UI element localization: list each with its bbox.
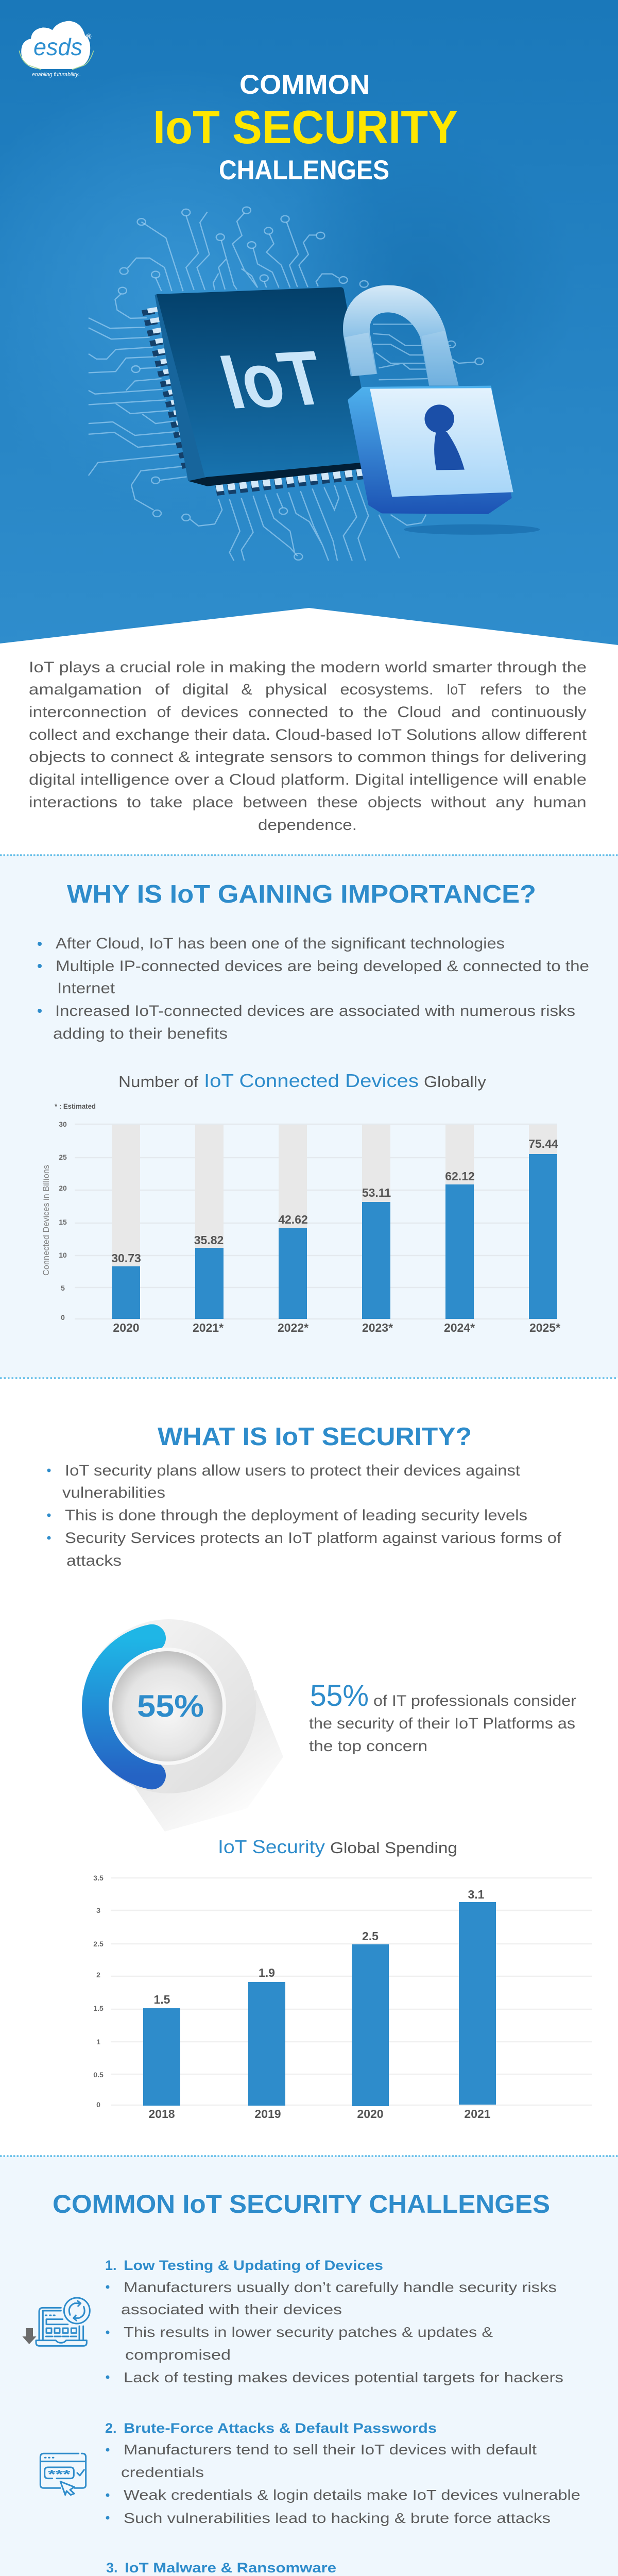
item 1: low testing and updating: associated with their devices	[121, 2301, 342, 2317]
intro paragraph: physical	[265, 681, 327, 698]
item 2: brute-force attacks: Manufacturers tend to sell their IoT devices with default	[124, 2442, 537, 2458]
logo: esds cloud: ®	[85, 32, 92, 41]
bar chart: connected devices globally: 35.82	[194, 1233, 224, 1247]
chip body	[154, 287, 376, 486]
chart title: IoT security spending: IoT Security	[218, 1836, 325, 1857]
intro paragraph: any	[495, 794, 524, 811]
bar chart: IoT security global spending: 3.5	[93, 1874, 104, 1882]
item 1: low testing and updating: Low Testing & Updating of Devices	[124, 2258, 383, 2273]
hero banner	[0, 0, 618, 645]
item 2: brute-force attacks	[105, 2420, 580, 2526]
stat callout: the top concern	[309, 1738, 427, 1755]
stat callout: 55%	[310, 1679, 369, 1713]
bar chart: connected devices globally: 10	[59, 1251, 67, 1259]
item 2: brute-force attacks: credentials	[121, 2464, 204, 2480]
intro paragraph: devices	[181, 704, 238, 721]
bar chart: IoT security global spending: 3.1	[468, 1888, 485, 1901]
item 3: malware and ransomware: IoT Malware & Ransomware	[125, 2560, 336, 2575]
intro paragraph: interactions	[29, 794, 117, 811]
item 2: brute-force attacks: Weak credentials & login details make IoT devices vulnerable	[124, 2487, 580, 2503]
bar chart: IoT security global spending: 0	[96, 2100, 100, 2109]
bar chart: connected devices globally: Connected Devices in Billions	[41, 1165, 51, 1276]
bar chart: connected devices globally: 53.11	[362, 1186, 391, 1199]
bar chart: connected devices globally: * : Estimated	[55, 1102, 96, 1110]
bar chart: connected devices globally: 2025*	[529, 1321, 560, 1334]
chart title: IoT security spending	[218, 1836, 457, 1857]
intro paragraph: the	[364, 704, 387, 721]
chart title: IoT connected devices: Globally	[424, 1073, 487, 1091]
title	[153, 70, 458, 185]
stat callout	[309, 1679, 576, 1755]
intro paragraph: amalgamation	[29, 681, 142, 698]
chip label IoT: IoT	[211, 335, 334, 425]
donut gauge: 55 percent: 55%	[137, 1689, 204, 1723]
bullets: why IoT matters	[38, 935, 589, 1042]
bullets: why IoT matters: After Cloud, IoT has been one of the significant technologies	[56, 935, 505, 952]
bar chart: connected devices globally: 2022*	[278, 1321, 308, 1334]
bar chart: IoT security global spending: 3	[96, 1906, 100, 1914]
item 1: low testing and updating: compromised	[125, 2347, 231, 2363]
intro paragraph: ecosystems.	[340, 681, 434, 698]
item 1: low testing and updating: Lack of testing makes devices potential targets for hackers	[124, 2369, 563, 2385]
intro paragraph: between	[243, 794, 307, 811]
bar chart: connected devices globally: 25	[59, 1153, 67, 1161]
stat callout: the security of their IoT Platforms as	[309, 1715, 575, 1732]
bar chart: connected devices globally: 20	[59, 1184, 67, 1192]
chart title: IoT security spending: Global Spending	[330, 1839, 457, 1857]
intro paragraph: digital intelligence over a Cloud platform. Digital intelligence will enable	[29, 771, 587, 788]
bullets: what is IoT security: IoT security plans allow users to protect their devices against	[65, 1462, 521, 1479]
chip pins	[148, 308, 364, 491]
bar chart: connected devices globally: 42.62	[278, 1213, 308, 1226]
logo: esds cloud: enabling futurability..	[32, 72, 81, 78]
intro paragraph: IoT	[447, 681, 466, 698]
bullets: why IoT matters: adding to their benefits	[53, 1025, 228, 1042]
intro paragraph: place	[193, 794, 233, 811]
bullets: why IoT matters: Multiple IP-connected devices are being developed & connected to the	[56, 958, 589, 975]
bar chart: connected devices globally: 2024*	[444, 1321, 475, 1334]
illustration: IoT chip and open padlock	[89, 207, 540, 561]
intro paragraph: to	[127, 794, 141, 811]
intro paragraph: the	[563, 681, 587, 698]
intro paragraph: and	[451, 704, 481, 721]
bar chart: connected devices globally: 2021*	[193, 1321, 224, 1334]
bullets: what is IoT security: This is done through the deployment of leading security levels	[65, 1507, 527, 1524]
intro paragraph: these	[317, 794, 358, 811]
bar chart: connected devices globally: 30	[59, 1120, 67, 1128]
logo: esds cloud: esds	[33, 33, 82, 60]
bar chart: IoT security global spending: 2021	[464, 2107, 491, 2121]
intro paragraph: objects	[368, 794, 422, 811]
item 1: low testing and updating: 1.	[105, 2258, 117, 2273]
intro paragraph: connected	[248, 704, 329, 721]
bar chart: IoT security global spending: 1.9	[259, 1966, 275, 1979]
item 2: brute-force attacks: Brute-Force Attacks & Default Passwords	[124, 2420, 437, 2436]
intro paragraph: take	[150, 794, 182, 811]
intro paragraph: of	[157, 704, 171, 721]
bar chart: connected devices globally: 75.44	[528, 1137, 558, 1150]
bar chart: connected devices globally: 15	[59, 1218, 67, 1226]
chart title: IoT connected devices	[118, 1070, 487, 1091]
bar chart: connected devices globally: 5	[61, 1284, 65, 1292]
padlock body	[348, 386, 513, 514]
stat callout: of IT professionals consider	[373, 1692, 576, 1709]
intro paragraph: interconnection	[29, 704, 147, 721]
logo: esds cloud	[19, 21, 94, 78]
intro paragraph: continuously	[491, 704, 587, 721]
intro paragraph: human	[533, 794, 587, 811]
bullets: what is IoT security: attacks	[66, 1552, 122, 1569]
intro paragraph: to	[339, 704, 353, 721]
item 2: brute-force attacks: 2.	[105, 2420, 117, 2436]
bullets: why IoT matters: Increased IoT-connected devices are associated with numerous risks	[55, 1003, 575, 1020]
intro paragraph: to	[535, 681, 550, 698]
intro paragraph: objects to connect & integrate sensors to common things for delivering	[29, 749, 587, 766]
bar chart: connected devices globally: 62.12	[445, 1170, 475, 1183]
bar chart: connected devices globally: 2020	[113, 1321, 140, 1334]
bar chart: IoT security global spending: 2020	[357, 2107, 384, 2121]
icon: password window: ***	[48, 2468, 71, 2482]
bar chart: IoT security global spending: 2.5	[362, 1929, 379, 1943]
intro paragraph: without	[431, 794, 486, 811]
circuit traces	[89, 207, 484, 561]
bullets: what is IoT security: vulnerabilities	[62, 1484, 165, 1501]
item 3: malware and ransomware: 3.	[106, 2560, 118, 2575]
bar chart: IoT security global spending: 2.5	[93, 1940, 104, 1948]
heading: common IoT security challenges: COMMON IoT SECURITY CHALLENGES	[53, 2190, 550, 2218]
bar chart: IoT security global spending: 2018	[148, 2107, 175, 2121]
intro paragraph: digital	[182, 681, 229, 698]
bar chart: connected devices globally: 2023*	[362, 1321, 393, 1334]
intro paragraph: IoT plays a crucial role in making the modern world smarter through the	[29, 659, 587, 676]
item 1: low testing and updating: Manufacturers usually don’t carefully handle security risks	[124, 2279, 557, 2295]
bar chart: IoT security global spending	[93, 1874, 592, 2121]
donut gauge: 55 percent	[82, 1619, 283, 1832]
item 3: malware and ransomware	[106, 2560, 562, 2576]
bullets: what is IoT security	[47, 1462, 562, 1569]
bullets: what is IoT security: Security Services protects an IoT platform against various forms of	[65, 1530, 562, 1547]
bar chart: connected devices globally: 0	[61, 1313, 65, 1321]
intro paragraph: &	[241, 681, 252, 698]
bar chart: IoT security global spending: 1	[96, 2038, 100, 2046]
intro paragraph: dependence.	[258, 817, 357, 834]
bar chart: IoT security global spending: 2	[96, 1971, 100, 1979]
intro paragraph: Cloud	[397, 704, 441, 721]
bar chart: IoT security global spending: 1.5	[93, 2004, 104, 2012]
heading: what is IoT security: WHAT IS IoT SECURITY?	[158, 1423, 472, 1451]
title: COMMON	[239, 70, 370, 100]
chart title: IoT connected devices: IoT Connected Devices	[204, 1070, 419, 1091]
padlock shackle	[343, 285, 458, 386]
bar chart: connected devices globally	[41, 1102, 560, 1334]
intro paragraph: of	[155, 681, 170, 698]
icon: laptop update with down arrow	[22, 2298, 90, 2346]
item 1: low testing and updating	[105, 2258, 563, 2385]
title: CHALLENGES	[219, 155, 389, 185]
intro paragraph: collect and exchange their data. Cloud-based IoT Solutions allow different	[29, 726, 587, 743]
bar chart: connected devices globally: 30.73	[111, 1251, 141, 1265]
bar chart: IoT security global spending: 2019	[254, 2107, 281, 2121]
bullets: why IoT matters: Internet	[57, 980, 115, 997]
bar chart: IoT security global spending: 0.5	[93, 2071, 104, 2079]
icon: password window	[40, 2453, 86, 2495]
item 2: brute-force attacks: Such vulnerabilities lead to hacking & brute force attacks	[124, 2510, 551, 2526]
chart title: IoT connected devices: Number of	[118, 1073, 198, 1091]
intro paragraph	[29, 659, 587, 834]
padlock shadow	[404, 524, 540, 535]
intro paragraph: refers	[480, 681, 522, 698]
title: IoT SECURITY	[153, 101, 458, 154]
bar chart: IoT security global spending: 1.5	[154, 1993, 170, 2006]
heading: why is IoT gaining importance: WHY IS IoT GAINING IMPORTANCE?	[67, 880, 536, 908]
item 1: low testing and updating: This results in lower security patches & updates &	[124, 2324, 493, 2340]
